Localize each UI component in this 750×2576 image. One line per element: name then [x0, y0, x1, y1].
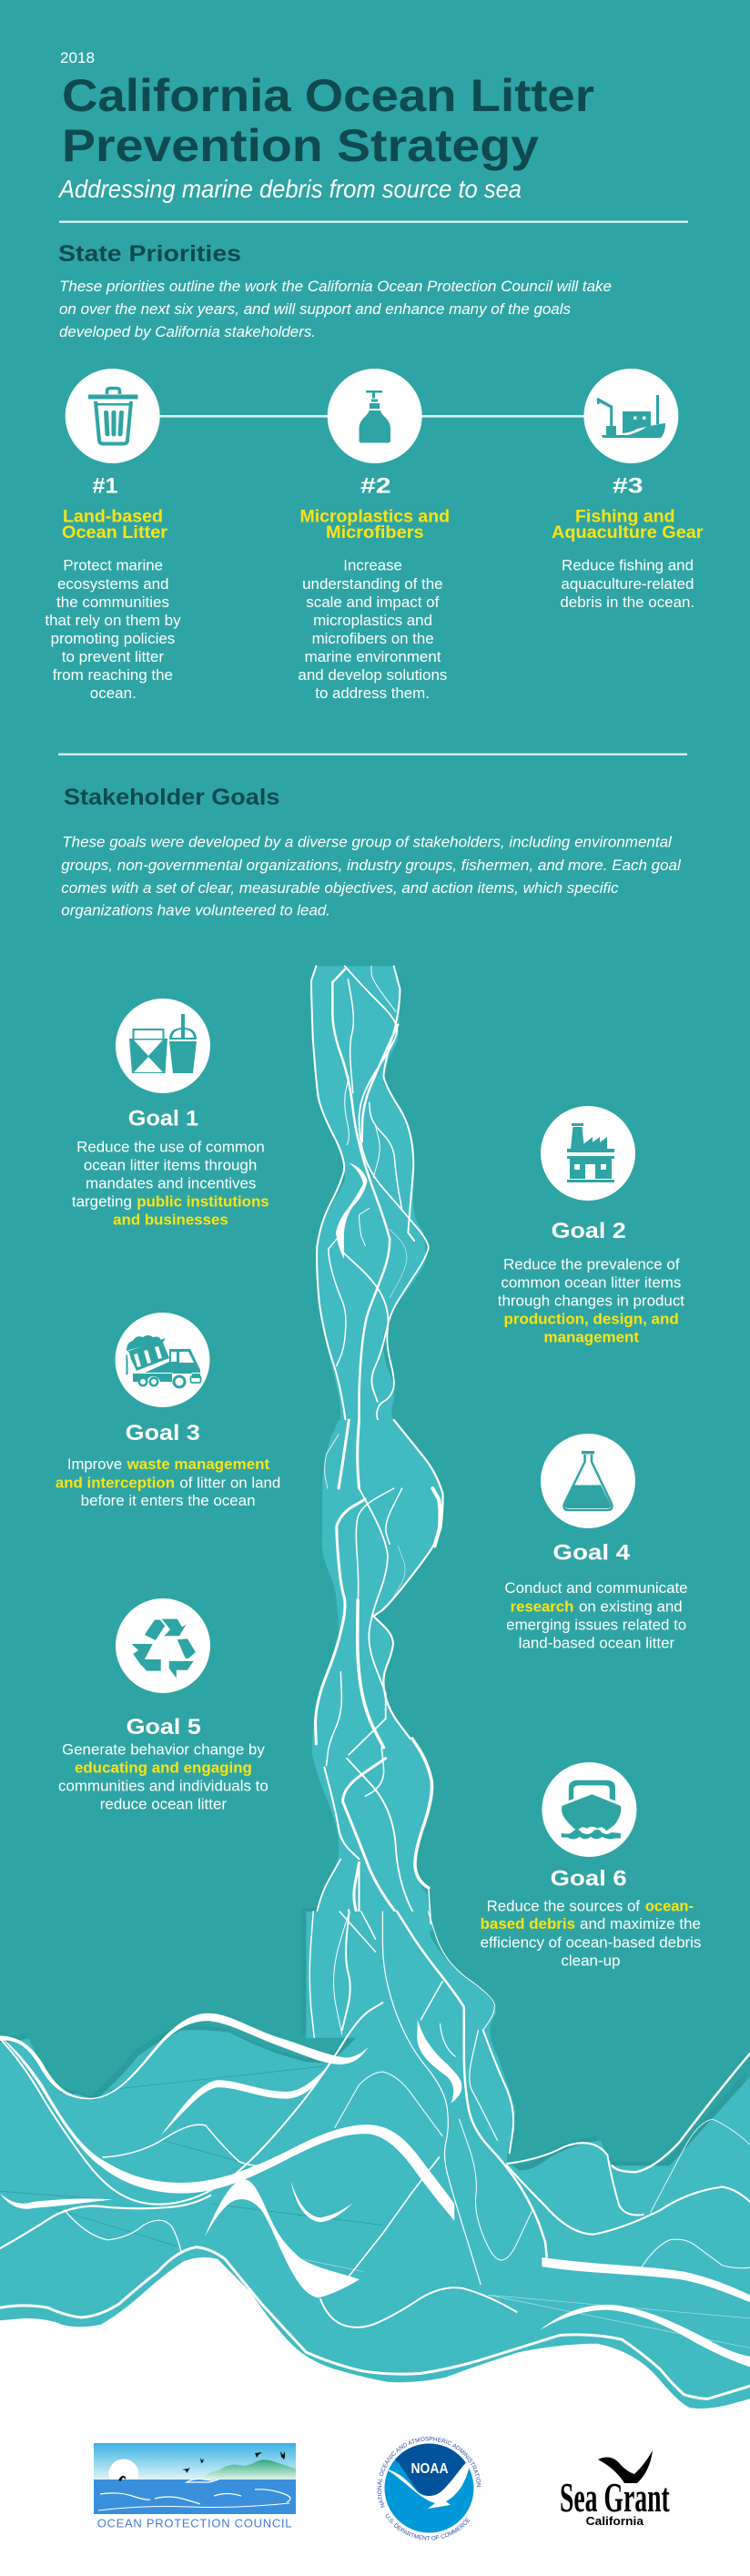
middle stream	[310, 1420, 443, 1984]
priority text	[45, 557, 181, 702]
panel: goal 2	[498, 1106, 684, 1346]
heading: Goal 3	[126, 1421, 200, 1445]
ocean waves shadow	[0, 1908, 750, 2238]
priority text: that rely on them by	[45, 613, 181, 629]
priority text: Increase	[343, 557, 402, 573]
priority heading	[552, 506, 704, 543]
icon: ship on waves	[542, 1762, 636, 1857]
goal text: of litter on land	[179, 1475, 280, 1491]
goal text: before it enters the ocean	[81, 1493, 255, 1509]
goal text: reduce ocean litter	[100, 1796, 228, 1812]
priority heading: Aquaculture Gear	[552, 522, 704, 543]
subtitle: Addressing marine debris from source to sea	[57, 175, 522, 203]
panel: goal 3	[56, 1313, 280, 1509]
priority text: aquaculture-related	[561, 576, 694, 593]
priority text: Protect marine	[63, 557, 163, 573]
icon: fishing boat	[583, 369, 678, 463]
number 2: #2	[360, 473, 391, 499]
priority text: to prevent litter	[62, 649, 165, 665]
upper stream	[310, 966, 429, 1456]
goal text: and maximize the	[580, 1916, 701, 1932]
goal text	[504, 1580, 688, 1651]
header	[57, 49, 594, 203]
stakeholder intro paragraph	[61, 834, 682, 919]
goal text: on existing and	[579, 1598, 683, 1615]
goal text: targeting	[72, 1194, 132, 1211]
icon: flask	[541, 1434, 635, 1528]
goal text: clean-up	[561, 1952, 621, 1969]
goal text: Conduct and communicate	[504, 1580, 688, 1597]
priority text: from reaching the	[53, 667, 173, 684]
goal text: Reduce the prevalence of	[503, 1256, 680, 1273]
priority heading: Ocean Litter	[62, 522, 167, 543]
intro paragraph	[59, 278, 612, 340]
logo: Sea Grant California: California	[586, 2514, 644, 2528]
panel: goal 4	[504, 1434, 688, 1651]
goal text: emerging issues related to	[506, 1617, 686, 1633]
goal text	[72, 1140, 269, 1229]
priority heading: Fishing and	[575, 506, 675, 526]
priority text: marine environment	[305, 649, 441, 665]
goal text	[58, 1741, 269, 1812]
icon: disposable food containers	[116, 999, 210, 1093]
heading: Goal 1	[128, 1106, 198, 1131]
goal text: Improve	[67, 1456, 122, 1473]
stakeholder intro paragraph: comes with a set of clear, measurable objectives, and action items, which specific	[61, 879, 619, 897]
goal text: and interception	[56, 1475, 175, 1491]
logo: NOAA: NOAA	[411, 2461, 448, 2477]
priority text	[298, 557, 447, 702]
goal text: management	[544, 1330, 640, 1346]
title: California Ocean Litter	[62, 70, 594, 121]
goal text: research	[511, 1598, 573, 1615]
priority text: promoting policies	[51, 631, 175, 647]
logo: Sea Grant California	[560, 2450, 670, 2528]
goal text: efficiency of ocean-based debris	[481, 1934, 701, 1951]
goal text: land-based ocean litter	[519, 1635, 675, 1651]
priority text: microfibers on the	[312, 631, 434, 647]
goal text: waste management	[126, 1456, 270, 1473]
logo: NOAA	[377, 2436, 481, 2541]
goal text: based debris	[481, 1916, 575, 1932]
panel: goal 1	[72, 999, 269, 1229]
heading: Goal 6	[551, 1866, 627, 1891]
priority 1	[45, 369, 181, 702]
priority heading	[300, 506, 450, 543]
priority heading: Microplastics and	[300, 506, 450, 526]
icon: recycle symbol	[116, 1598, 210, 1693]
panel: goal 6	[481, 1762, 701, 1969]
priority text: scale and impact of	[306, 594, 440, 611]
title	[62, 70, 594, 171]
icon: dump truck	[115, 1313, 209, 1407]
intro paragraph: developed by California stakeholders.	[59, 323, 316, 340]
priority 3	[552, 369, 704, 611]
priority heading: Land-based	[63, 506, 163, 526]
priority text: and develop solutions	[298, 667, 447, 684]
ocean waves	[0, 1912, 750, 2409]
goal text: educating and engaging	[75, 1760, 252, 1777]
priority text	[560, 557, 694, 611]
goal text	[56, 1456, 280, 1509]
year: 2018	[60, 49, 95, 66]
heading: Goal 2	[552, 1219, 626, 1243]
logo: Ocean Protection Council: OCEAN PROTECTION COUNCIL	[97, 2516, 291, 2530]
stakeholder intro paragraph: organizations have volunteered to lead.	[61, 902, 330, 919]
priority 2	[298, 369, 450, 702]
goal text: communities and individuals to	[58, 1778, 269, 1794]
heading: stakeholder goals: Stakeholder Goals	[64, 785, 279, 810]
logo: NOAA: U.S. DEPARTMENT OF COMMERCE	[386, 2513, 470, 2541]
goal text: Reduce the sources of	[487, 1898, 640, 1914]
goal text: Generate behavior change by	[62, 1741, 266, 1758]
priority text: Reduce fishing and	[562, 557, 694, 573]
heading: state priorities: State Priorities	[58, 241, 241, 267]
icon: factory	[541, 1106, 635, 1201]
priority text: understanding of the	[302, 576, 443, 593]
number 3: #3	[613, 473, 644, 499]
title: Prevention Strategy	[62, 120, 539, 171]
goal text	[481, 1898, 701, 1969]
goal text: public institutions	[137, 1194, 269, 1211]
priority text: ocean.	[90, 685, 137, 702]
logo: Ocean Protection Council	[94, 2443, 296, 2530]
priority heading: Microfibers	[326, 522, 424, 543]
goal text	[498, 1256, 684, 1346]
priority heading	[62, 506, 167, 543]
goal text: common ocean litter items	[501, 1275, 681, 1292]
icon: trash bin	[66, 369, 160, 463]
heading: Goal 4	[552, 1540, 631, 1565]
priority text: debris in the ocean.	[560, 594, 694, 611]
illustration: litter stream flowing into ocean	[0, 966, 750, 2409]
priority text: the communities	[56, 594, 169, 611]
priority text: to address them.	[315, 685, 430, 702]
stakeholder intro paragraph: groups, non-governmental organizations, industry groups, fishermen, and more. Each goal	[61, 857, 682, 874]
goal text: Reduce the use of common	[76, 1140, 265, 1156]
heading: Goal 5	[127, 1715, 201, 1739]
intro paragraph: These priorities outline the work the California Ocean Protection Council will take	[59, 278, 612, 295]
goal text: ocean litter items through	[84, 1158, 257, 1174]
goal text: ocean-	[645, 1898, 694, 1914]
number 1: #1	[93, 473, 118, 499]
icon: soap bottle	[328, 369, 422, 463]
logo: NOAA: NATIONAL OCEANIC AND ATMOSPHERIC ADMINISTRATION	[377, 2436, 481, 2509]
panel: state priorities	[45, 241, 704, 702]
priority text: ecosystems and	[57, 576, 169, 593]
intro paragraph: on over the next six years, and will support and enhance many of the goals	[59, 300, 571, 318]
priority text: microplastics and	[313, 613, 432, 629]
goal text: production, design, and	[504, 1312, 679, 1328]
panel: goal 5	[58, 1598, 269, 1812]
logo: Sea Grant California: Sea Grant	[560, 2474, 670, 2520]
goal text: through changes in product	[498, 1293, 684, 1310]
goal text: and businesses	[113, 1212, 228, 1229]
stakeholder intro paragraph: These goals were developed by a diverse group of stakeholders, including environmental	[62, 834, 673, 851]
goal text: mandates and incentives	[86, 1176, 256, 1192]
